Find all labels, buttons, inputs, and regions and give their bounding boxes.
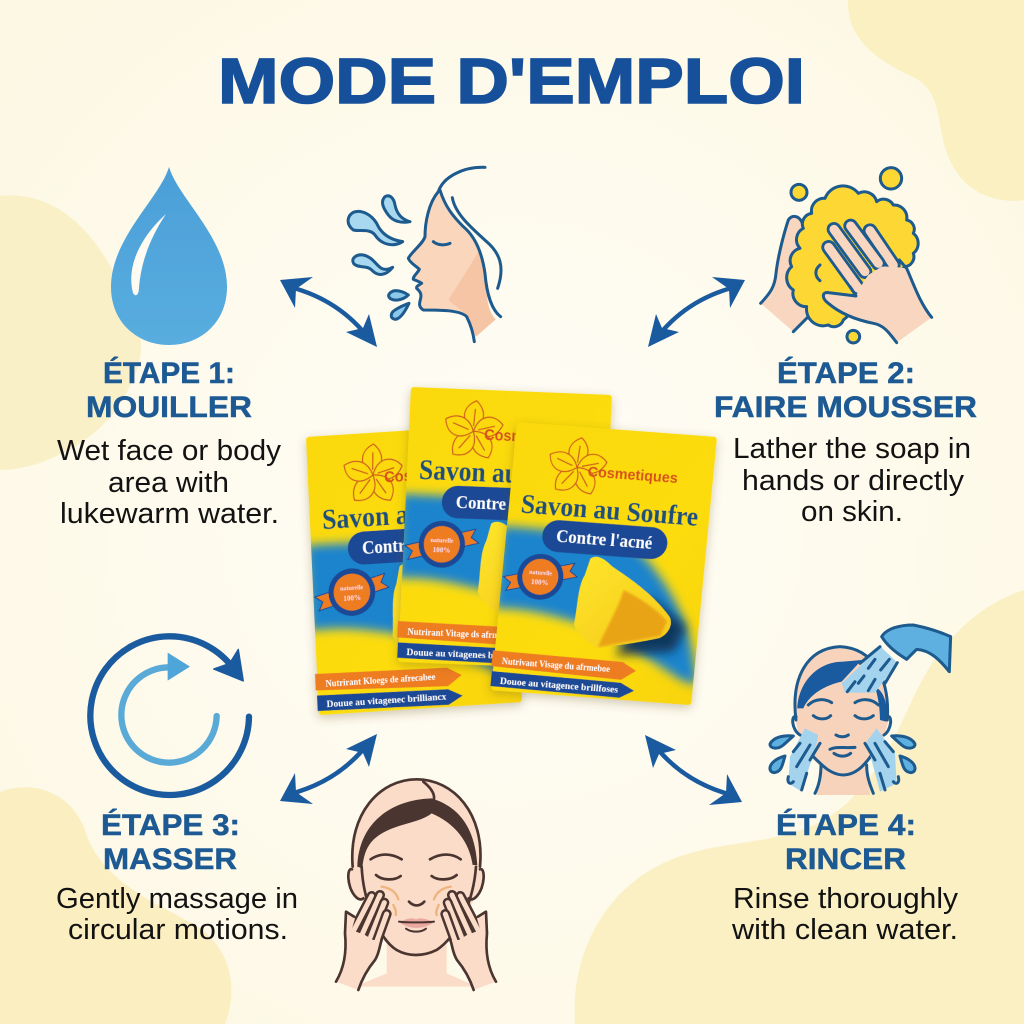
step 1 text <box>57 356 281 530</box>
step 2 text: on skin. <box>801 496 903 528</box>
package: front: Cosmetiques <box>587 463 679 487</box>
package: left: Contre l'acné <box>362 532 460 558</box>
step 3 text: MASSER <box>103 843 237 876</box>
step 4 text: Rinse thoroughly <box>733 883 959 915</box>
step 3 text: Gently massage in <box>56 883 298 915</box>
arrow: step 1 to product <box>280 277 377 347</box>
product: three soap packages <box>301 387 722 715</box>
step 1 text: ÉTAPE 1: <box>103 356 235 390</box>
package: left: Nutrirant Kloegs de afrecabee <box>325 672 436 690</box>
package: left: 100% <box>343 594 361 603</box>
step 1 text: lukewarm water. <box>60 498 279 530</box>
icon: rinsing face under shower <box>770 625 951 795</box>
package: middle: 100% <box>433 546 451 555</box>
step 2 text: FAIRE MOUSSER <box>714 391 977 424</box>
step 2 text: ÉTAPE 2: <box>777 356 915 390</box>
step 2 text <box>714 356 977 528</box>
step 4 text: ÉTAPE 4: <box>776 808 916 842</box>
package: left: Cosmetiques <box>384 464 476 487</box>
step 3 text: circular motions. <box>68 914 288 946</box>
package: front: Contre l'acné <box>555 526 653 553</box>
step 1 text: Wet face or body <box>57 435 281 467</box>
arrow: step 4 to product <box>645 735 742 805</box>
step 3 text: ÉTAPE 3: <box>101 808 240 842</box>
icon: water drop <box>111 167 227 345</box>
step 1 text: MOUILLER <box>86 391 252 424</box>
icon: lathering hands <box>761 168 932 343</box>
icon: face profile with water <box>348 167 501 342</box>
arrow: step 3 to product <box>280 734 377 804</box>
step 2 text: Lather the soap in <box>733 433 971 465</box>
step 4 text <box>731 808 959 946</box>
icon: circular motion arrows <box>90 636 249 795</box>
package: front: Douoe au vitagence brillfoses <box>499 677 619 696</box>
arrow: step 2 to product <box>648 277 745 347</box>
step 3 text <box>56 808 298 946</box>
package: front: naturelle <box>529 570 553 578</box>
step 4 text: with clean water. <box>731 914 958 946</box>
package: front: Nutrivant Visage du afrmeboe <box>501 657 610 675</box>
title: MODE D'EMPLOI <box>218 45 805 117</box>
package: middle <box>393 387 617 670</box>
package: left: naturelle <box>340 585 364 593</box>
package: middle: naturelle <box>430 538 454 545</box>
icon: massaging face with hands <box>336 779 496 990</box>
package: middle: Douue au vitagenes brillfoses <box>406 647 526 663</box>
package: middle: Nutrirant Vitage ds afrmeboe <box>407 627 517 642</box>
step 1 text: area with <box>108 467 229 499</box>
package: front <box>486 422 722 705</box>
package: left: Douue au vitagenec brilliancx <box>326 692 447 710</box>
package: left <box>301 424 527 715</box>
package: middle: Contre l'acné <box>455 492 553 516</box>
package: front: Savon au Soufre <box>520 488 700 532</box>
step 4 text: RINCER <box>785 843 906 876</box>
step 2 text: hands or directly <box>742 465 965 497</box>
package: left: Savon au Soufre <box>321 492 502 536</box>
package: middle: Cosmetiques <box>484 427 575 448</box>
package: middle: Savon au Soufre <box>418 455 598 493</box>
package: front: 100% <box>531 578 549 587</box>
